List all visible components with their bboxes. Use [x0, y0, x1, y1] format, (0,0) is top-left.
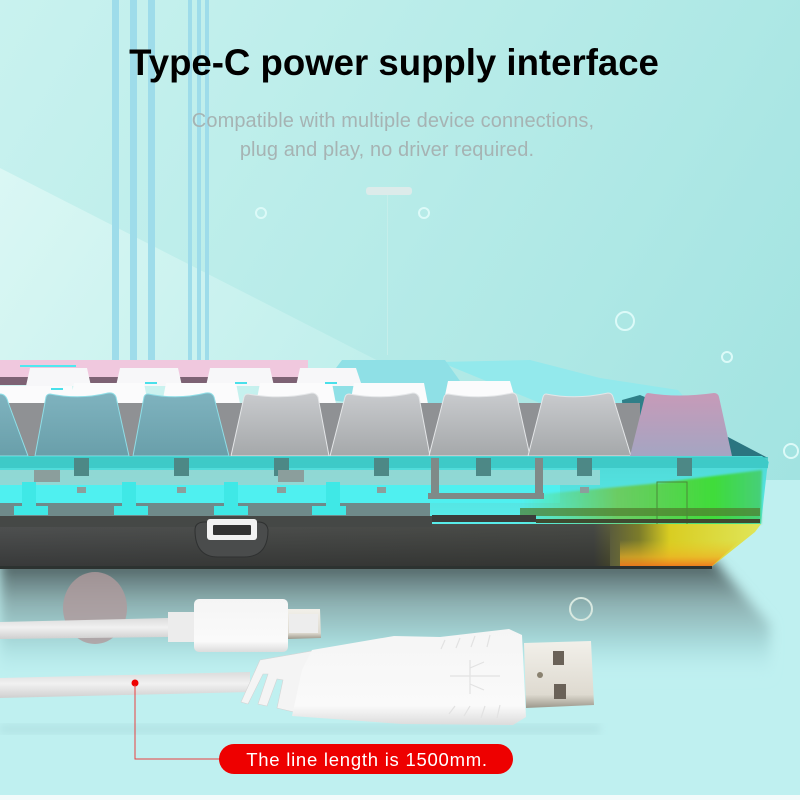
transparent case band — [0, 456, 769, 525]
USB-A cable — [0, 629, 594, 725]
decorative vertical stripes — [112, 0, 209, 360]
plug strain relief ribs — [241, 651, 312, 712]
decorative pill and thin line — [366, 187, 412, 355]
front keycaps — [0, 393, 732, 456]
floor reflection — [0, 560, 800, 800]
USB port — [195, 519, 268, 557]
subtitle: Compatible with multiple device connections, — [192, 110, 594, 132]
callout: line length — [132, 680, 513, 774]
Type-C cable — [0, 599, 321, 652]
back rows of keys — [0, 360, 768, 460]
title: Type-C power supply interface — [129, 42, 659, 83]
keyboard — [0, 360, 769, 569]
bubbles — [256, 208, 798, 458]
subtitle — [192, 110, 594, 161]
callout: line length: The line length is 1500mm. — [246, 749, 488, 770]
dark lower case — [0, 516, 761, 569]
subtitle: plug and play, no driver required. — [240, 139, 534, 161]
